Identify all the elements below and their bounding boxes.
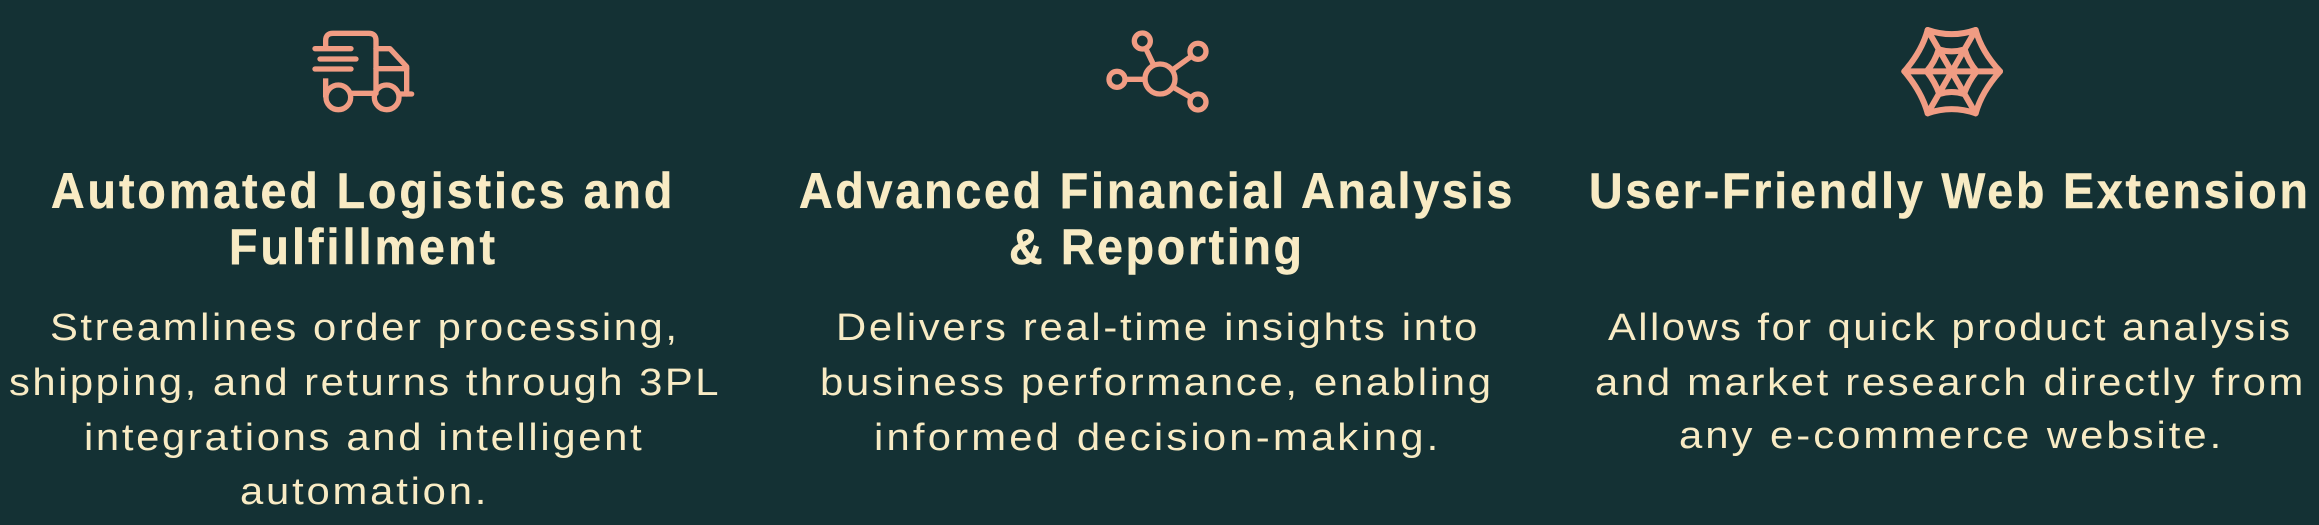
icon: delivery truck (315, 33, 412, 110)
text block: web extension description: and market research directly from (1595, 362, 2303, 404)
text block: financial description: Delivers real-time insights into (836, 307, 1477, 349)
heading: advanced financial analysis and reporting (799, 163, 1512, 275)
text block: financial description: informed decision-making. (874, 417, 1438, 459)
panel: advanced financial analysis and reporting (799, 33, 1512, 459)
heading: automated logistics and fulfillment: Automated Logistics and (51, 163, 672, 219)
text block: logistics description: automation. (240, 471, 486, 513)
heading: advanced financial analysis and reporting: & Reporting (1009, 219, 1302, 275)
text block: logistics description: Streamlines order processing, (50, 307, 677, 349)
heading: automated logistics and fulfillment: Fulfillment (229, 219, 495, 275)
text block: web extension description: any e-commerce website. (1679, 415, 2221, 457)
heading: advanced financial analysis and reporting: Advanced Financial Analysis (799, 163, 1512, 219)
text block: financial description: business performance, enabling (820, 362, 1491, 404)
heading: automated logistics and fulfillment (51, 163, 672, 275)
text block: logistics description (9, 307, 718, 513)
text block: web extension description: Allows for quick product analysis (1608, 307, 2290, 349)
icon: spider web (1904, 30, 2000, 113)
text block: logistics description: shipping, and returns through 3PL (9, 362, 718, 404)
icon: network hub (1109, 33, 1206, 110)
text block: financial description (820, 307, 1491, 459)
panel: user-friendly web extension (1589, 30, 2308, 457)
text block: logistics description: integrations and intelligent (84, 417, 642, 459)
panel: automated logistics and fulfillment (9, 33, 718, 513)
heading: user-friendly web extension: User-Friendly Web Extension (1589, 163, 2308, 219)
text block: web extension description (1595, 307, 2303, 457)
